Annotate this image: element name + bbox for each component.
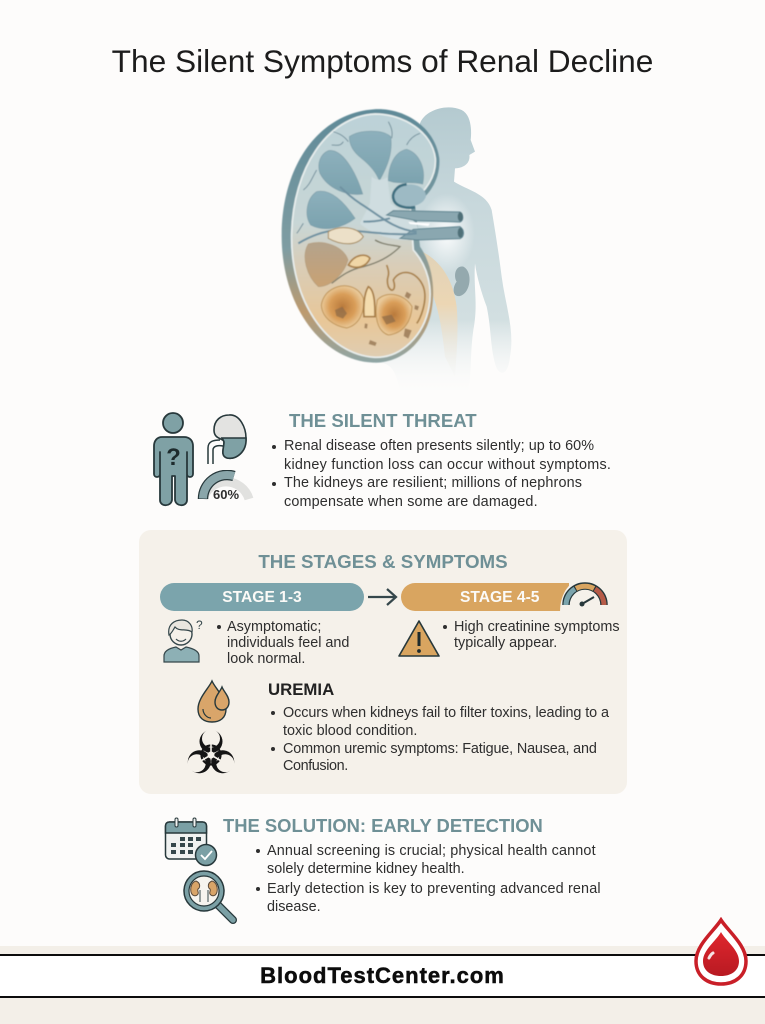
- text block: uremia bullets: Common uremic symptoms: Fatigue, Nausea, and: [283, 741, 597, 757]
- title: The Silent Symptoms of Renal Decline: [112, 43, 653, 79]
- icon: biohazard: [188, 730, 234, 774]
- text block: uremia bullets: Occurs when kidneys fail to filter toxins, leading to a: [283, 705, 609, 721]
- text block: solution bullets: solely determine kidney health.: [267, 861, 465, 877]
- text block: stage 1-3 symptoms: Asymptomatic;: [227, 619, 321, 635]
- icon: person feeling normal: [163, 618, 203, 663]
- text block: uremia bullets: toxic blood condition.: [283, 723, 417, 739]
- kidney: [282, 109, 464, 363]
- heading: the silent threat: THE SILENT THREAT: [289, 410, 477, 431]
- text block: silent threat bullets: The kidneys are resilient; millions of nephrons: [284, 475, 582, 491]
- heading: uremia: UREMIA: [268, 680, 334, 699]
- text block: solution bullets: disease.: [267, 899, 321, 915]
- icon: toxic drops: [197, 679, 230, 723]
- small kidney in silhouette: [454, 267, 470, 296]
- icon: severity gauge: [560, 582, 608, 611]
- text block: solution bullets: Annual screening is crucial; physical health cannot: [267, 843, 596, 859]
- stage 1-3 pill: STAGE 1-3: [222, 589, 302, 606]
- text block: stage 4-5 symptoms: High creatinine symptoms: [454, 619, 620, 635]
- panel: stages and symptoms: [139, 530, 627, 794]
- text block: uremia bullets: Confusion.: [283, 758, 348, 774]
- footer band with website: BloodTestCenter.com: [260, 963, 505, 988]
- icon: magnifier over kidneys: [183, 870, 237, 924]
- icon: blood drop logo: [694, 917, 748, 986]
- icon: 60% gauge: [198, 470, 254, 502]
- icon: 60% gauge: 60%: [213, 487, 239, 502]
- stage 4-5 pill: STAGE 4-5: [460, 589, 539, 606]
- arrow: [368, 588, 398, 606]
- icon: person with question mark: [153, 412, 194, 506]
- icon: person with question mark: ?: [166, 444, 181, 471]
- icon: calendar with check: [164, 818, 218, 866]
- text block: silent threat bullets: [272, 438, 611, 510]
- text block: stage 4-5 symptoms: typically appear.: [454, 635, 557, 651]
- text block: silent threat bullets: Renal disease often presents silently; up to 60%: [284, 438, 594, 454]
- ureter: [393, 245, 458, 377]
- text block: solution bullets: Early detection is key to preventing advanced renal: [267, 881, 601, 897]
- text block: stage 4-5 symptoms: [443, 619, 620, 651]
- stage 4-5 pill: [401, 583, 569, 611]
- heading: stages and symptoms: THE STAGES & SYMPTOMS: [258, 551, 508, 572]
- text block: stage 1-3 symptoms: look normal.: [227, 651, 305, 667]
- heading: the solution: THE SOLUTION: EARLY DETECTION: [223, 815, 543, 836]
- icon: person feeling normal: ?: [196, 618, 203, 632]
- footer band with website: [0, 954, 765, 998]
- icon: warning triangle: [398, 620, 440, 657]
- text block: stage 1-3 symptoms: [217, 619, 349, 667]
- icon: kidney half filled: [207, 414, 247, 464]
- text block: solution bullets: [256, 843, 601, 915]
- illustration: kidney and body silhouette: [281, 107, 512, 368]
- text block: silent threat bullets: compensate when some are damaged.: [284, 494, 538, 510]
- text block: stage 1-3 symptoms: individuals feel and: [227, 635, 349, 651]
- text block: silent threat bullets: kidney function loss can occur without symptoms.: [284, 457, 611, 473]
- text block: uremia bullets: [271, 705, 609, 774]
- footer: [0, 946, 765, 1024]
- body silhouette: [375, 107, 511, 390]
- stage 1-3 pill: [160, 583, 364, 611]
